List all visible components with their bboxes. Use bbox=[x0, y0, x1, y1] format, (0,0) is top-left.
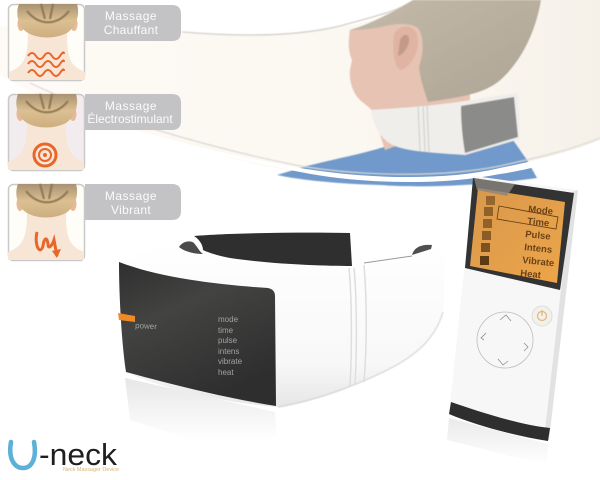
reflection bbox=[125, 378, 277, 440]
photo: man wearing neck massager bbox=[277, 0, 541, 186]
right pad end bbox=[412, 245, 432, 255]
front panel bbox=[119, 262, 276, 406]
label: Massage Vibrant: Vibrant bbox=[111, 203, 151, 217]
shirt bbox=[277, 140, 537, 186]
panel labels: power bbox=[135, 321, 157, 331]
panel labels: time bbox=[218, 326, 234, 335]
bezel bbox=[465, 178, 574, 290]
left pad end bbox=[179, 241, 203, 254]
logo: U-neck: Neck Massager Device bbox=[63, 467, 119, 473]
banner: cream photo band bbox=[0, 0, 600, 186]
LCD screen bbox=[470, 188, 565, 283]
ear bbox=[393, 26, 418, 70]
LCD selection box bbox=[497, 206, 558, 229]
body bbox=[118, 232, 445, 407]
panel labels: heat bbox=[218, 368, 234, 377]
remote body bbox=[449, 176, 578, 440]
collar bbox=[371, 93, 520, 155]
seam bbox=[349, 265, 366, 386]
label: Massage Chauffant bbox=[85, 5, 181, 41]
remote control bbox=[447, 176, 578, 465]
power button bbox=[532, 306, 552, 326]
neck massager device bbox=[118, 232, 445, 440]
icon: heat waves bbox=[28, 52, 64, 76]
thumbnail 3: vibrating massage bbox=[8, 184, 84, 260]
power tab bbox=[118, 313, 135, 322]
LCD menu: Mode bbox=[528, 204, 554, 218]
panel labels: pulse bbox=[218, 336, 238, 345]
bottom black band bbox=[449, 402, 550, 441]
LCD menu: Pulse bbox=[525, 229, 551, 243]
collar panel bbox=[461, 97, 518, 153]
LCD menu bbox=[520, 204, 555, 281]
navigation ring bbox=[477, 312, 533, 368]
LCD icons bbox=[480, 196, 495, 265]
label: Massage Vibrant: Massage bbox=[105, 189, 157, 203]
logo: U-neck bbox=[10, 437, 119, 473]
LCD menu: Vibrate bbox=[522, 255, 555, 269]
white swoosh bbox=[0, 75, 600, 182]
label: Massage Chauffant: Massage bbox=[105, 9, 157, 23]
thumbnail 2: electrostimulating massage bbox=[8, 94, 84, 170]
inner pad bbox=[194, 233, 352, 266]
hair bbox=[350, 0, 541, 102]
icon: zigzag arrow bbox=[36, 232, 57, 256]
panel labels: intens bbox=[218, 347, 239, 356]
label: Massage Vibrant bbox=[85, 184, 181, 220]
label: Massage Chauffant: Chauffant bbox=[104, 23, 159, 37]
reflection bbox=[447, 418, 548, 465]
logo: U-neck: -neck bbox=[39, 437, 118, 472]
panel labels: vibrate bbox=[218, 357, 243, 366]
panel labels bbox=[135, 315, 243, 377]
panel labels: mode bbox=[218, 315, 239, 324]
label: Massage Electrostimulant: Électrostimulant bbox=[87, 111, 173, 126]
LCD menu: Heat bbox=[520, 268, 542, 281]
skin bbox=[349, 0, 470, 150]
label: Massage Electrostimulant bbox=[85, 94, 181, 130]
icon: concentric circles bbox=[34, 144, 56, 166]
LCD menu: Intens bbox=[524, 242, 553, 256]
thumbnail 1: heating massage bbox=[8, 4, 85, 80]
LCD menu: Time bbox=[527, 216, 550, 229]
label: Massage Electrostimulant: Massage bbox=[105, 99, 157, 113]
